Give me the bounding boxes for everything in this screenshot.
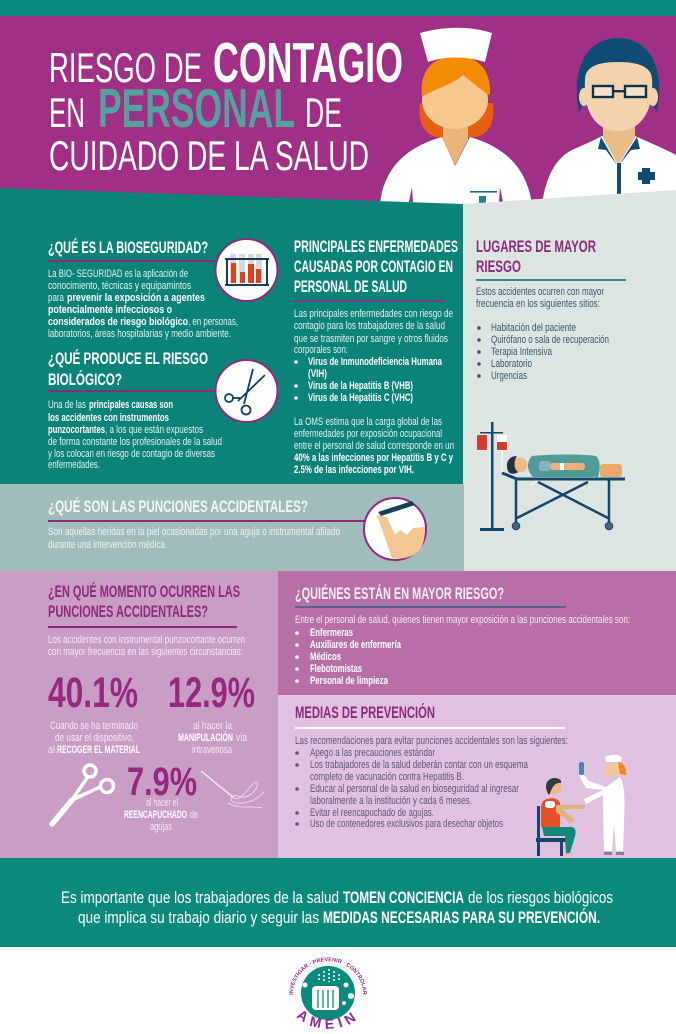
stat: 7.9%: agujas [150, 821, 172, 833]
text block: punzocortantes [48, 424, 105, 436]
list: recomendaciones: Los trabajadores de la salud deberán contar con un esquema [310, 759, 529, 771]
footer message: que implica su trabajo diario y seguir las [78, 909, 319, 927]
list: personal: Flebotomistas [310, 663, 362, 675]
list: personal: Enfermeras [310, 627, 353, 639]
text block: principales causas son [89, 399, 173, 411]
header panel [0, 16, 676, 206]
list: recomendaciones: laboralmente a la institución y cada 6 meses. [310, 795, 472, 807]
heading: PRINCIPALES ENFERMEDADES [294, 237, 458, 256]
icon: vaccination scene [536, 755, 626, 856]
top teal band [0, 0, 676, 16]
title: CUIDADO DE LA SALUD [49, 132, 369, 179]
text block: Las recomendaciones para evitar punciones accidentales son las siguientes: [295, 735, 568, 747]
panel: quienes [278, 571, 676, 695]
stat: 12.9%: MANIPULACIÓN [178, 731, 233, 744]
stat: 7.9%: al hacer el [146, 797, 178, 809]
footer message: TOMEN CONCIENCIA [343, 889, 464, 907]
stat: 7.9% [124, 760, 198, 833]
text block: laboratorios, áreas hospitalarias y medio ambiente. [48, 328, 231, 340]
stat: 40.1%: Cuando se ha terminado [50, 720, 138, 732]
list: personal: Auxiliares de enfermería [310, 639, 402, 651]
heading: MEDIAS DE PREVENCIÓN [295, 703, 435, 722]
text block: potencialmente infecciosos o [48, 304, 172, 316]
panel: momento [0, 571, 278, 858]
icon: doctor [542, 38, 676, 204]
list: virus [294, 356, 443, 404]
text block: los accidentes con instrumentos [48, 412, 169, 424]
icon: patient on stretcher with IV [477, 422, 625, 531]
text block: OMS: entre el personal de salud corresponde en un [294, 440, 454, 452]
text block [48, 268, 238, 340]
logo: AMEIN: INVESTIGAR · PREVENIR · CONTROLAR [289, 957, 367, 995]
footer message: de los riesgos biológicos [468, 889, 613, 907]
text block: durante una intervención médica. [48, 539, 167, 551]
list: recomendaciones: completo de vacunación contra Hepatitis B. [310, 771, 464, 783]
text block: frecuencia en los siguientes sitios: [476, 298, 600, 310]
heading: RIESGO [476, 257, 521, 276]
icon: needle and thread [201, 771, 264, 808]
list: recomendaciones: Apego a las precauciones estándar [310, 747, 435, 759]
section: medias de prevencion [295, 703, 626, 856]
heading: ¿EN QUÉ MOMENTO OCURREN LAS [48, 582, 240, 601]
text block: Las principales enfermedades con riesgo de [294, 308, 453, 320]
text block [48, 526, 340, 551]
text block [476, 286, 604, 310]
text block [48, 634, 245, 658]
section: punciones accidentales [48, 497, 426, 560]
text block: Estos accidentes ocurren con mayor [476, 286, 604, 298]
heading: ¿QUÉ PRODUCE EL RIESGO [48, 349, 208, 368]
title: EN [49, 89, 85, 136]
footer message [61, 889, 613, 927]
title: PERSONAL [98, 77, 295, 139]
text block: que se trasmiten por sangre y otros fluidos [294, 333, 448, 345]
stat: 7.9%: 7.9% [127, 760, 197, 804]
heading [48, 582, 240, 621]
stat: 40.1%: al [48, 744, 55, 756]
heading: BIOLÓGICO? [48, 370, 122, 389]
section: lugares de mayor riesgo [476, 237, 626, 531]
text block: La BIO- SEGURIDAD es la aplicación de [48, 268, 188, 280]
stat: 40.1%: RECOGER EL MATERIAL [57, 744, 140, 756]
title: DE [305, 89, 342, 136]
icon: white scissors [52, 765, 114, 824]
stat: 40.1%: de usar el dispositivo, [55, 732, 134, 744]
logo: AMEIN [289, 957, 367, 1029]
list: personal [295, 627, 402, 687]
text block: conocimiento, técnicas y equipamintos [48, 280, 191, 292]
section: principales enfermedades [294, 237, 458, 476]
text block: OMS: 2.5% de las infecciones por VIH. [294, 464, 414, 476]
list: sitios: Urgencias [491, 370, 527, 382]
list: sitios: Terapia Intensiva [491, 346, 553, 358]
text block [294, 308, 453, 356]
text block: OMS: 40% a las infecciones por Hepatitis B y C y [294, 452, 454, 464]
list: recomendaciones: Uso de contenedores exclusivos para desechar objetos [310, 818, 503, 830]
list: sitios: Habitación del paciente [491, 322, 576, 334]
heading [48, 349, 208, 389]
stat: 12.9%: 12.9% [168, 669, 255, 717]
text block: , a los que están expuestos [105, 424, 203, 436]
text block [48, 399, 222, 471]
title: CONTAGIO [213, 31, 403, 95]
text block: Son aquellas heridas en la piel ocasionadas por una aguja o instrumental afilado [48, 526, 340, 538]
stat: 7.9%: de [190, 809, 198, 821]
heading: ¿QUÉ SON LAS PUNCIONES ACCIDENTALES? [48, 497, 308, 516]
heading: ¿QUÉ ES LA BIOSEGURIDAD? [48, 238, 208, 257]
footer message: Es importante que los trabajadores de la salud [61, 889, 339, 907]
icon: test tubes [216, 239, 278, 301]
title: RIESGO DE [49, 44, 202, 91]
stat: 12.9% [168, 669, 255, 756]
text block: y los colocan en riesgo de contagio de diversas [48, 448, 215, 460]
text block: OMS: La OMS estima que la carga global de las [294, 416, 442, 428]
heading [294, 237, 458, 296]
text block: para [48, 292, 65, 304]
icon: finger puncture [364, 498, 426, 560]
heading: PUNCIONES ACCIDENTALES? [48, 602, 208, 621]
list: personal: Médicos [310, 651, 341, 663]
section: en que momento [48, 582, 264, 833]
text block: de forma constante los profesionales de la salud [48, 436, 222, 448]
panel: footer [0, 858, 676, 947]
panel: grey right column [463, 190, 676, 572]
text block: Los accidentes con instrumental punzocortante ocurren [48, 634, 245, 646]
stat: 12.9%: al hacer la [193, 720, 233, 732]
text block: contagio para los trabajadores de la salud [294, 320, 445, 332]
stat: 12.9%: vía [236, 732, 248, 744]
heading: ¿QUIÉNES ESTÁN EN MAYOR RIESGO? [295, 584, 504, 603]
panel: punciones accidentales [0, 484, 464, 571]
text block: con mayor frecuencia en las siguientes circunstancias: [48, 646, 243, 658]
list: recomendaciones: Educar al personal de la salud en bioseguridad al ingresar [310, 783, 519, 795]
title [49, 31, 403, 179]
list: sitios: Laboratorio [491, 358, 532, 370]
icon: nurse [380, 28, 532, 204]
text block: OMS: enfermedades por exposición ocupacional [294, 428, 442, 440]
stat: 40.1%: 40.1% [48, 669, 138, 717]
list: virus: (VIH) [308, 368, 327, 380]
stat: 12.9%: intravenosa [192, 744, 233, 756]
text block: corporales son: [294, 344, 348, 356]
list: virus: Virus de la Hepatitis C (VHC) [308, 392, 413, 404]
stat: 40.1% [48, 669, 140, 756]
list: recomendaciones [295, 747, 529, 830]
heading: CAUSADAS POR CONTAGIO EN [294, 257, 453, 276]
list: sitios [477, 322, 609, 382]
heading: LUGARES DE MAYOR [476, 237, 596, 256]
list: recomendaciones: Evitar el reencapuchado de agujas. [310, 807, 434, 819]
text block: enfermedades. [48, 459, 100, 471]
text block: , en personas, [188, 316, 238, 328]
text block: prevenir la exposición a agentes [67, 292, 205, 304]
text block: Una de las [48, 399, 86, 411]
heading [476, 237, 596, 276]
logo: AMEIN: AMEIN [296, 1011, 356, 1029]
panel: teal main [0, 188, 463, 485]
list: sitios: Quirófano o sala de recuperación [491, 334, 609, 346]
heading: PERSONAL DE SALUD [294, 277, 407, 296]
list: virus: Virus de Inmunodeficiencia Humana [308, 356, 443, 368]
text block: considerados de riesgo biológico [48, 316, 188, 328]
list: personal: Personal de limpieza [310, 675, 389, 687]
icon: scissors [216, 360, 278, 422]
list: virus: Virus de la Hepatitis B (VHB) [308, 380, 413, 392]
text block: OMS [294, 416, 454, 476]
section: riesgo biologico [48, 349, 278, 471]
section: bioseguridad [48, 238, 278, 340]
stat: 7.9%: REENCAPUCHADO [124, 809, 187, 821]
panel: prevencion [278, 695, 676, 858]
section: quienes estan en mayor riesgo [295, 584, 630, 687]
